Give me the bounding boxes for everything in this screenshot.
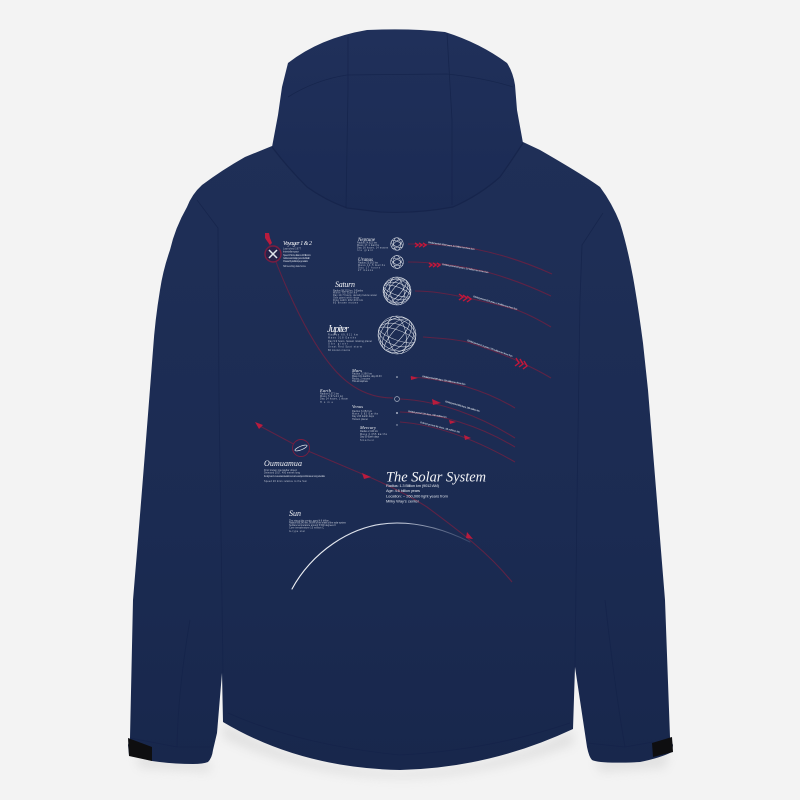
cuff tab: left [128, 738, 152, 761]
label: voyager: Still sending data home [283, 265, 307, 268]
label: mars: Radius 3,390 km [352, 372, 372, 376]
label: sun: Surface temperature around 5,500 degrees C [289, 524, 336, 527]
label: saturn: Mass 95 Earths [333, 292, 358, 294]
label: saturn [333, 280, 377, 304]
uranus orbit [408, 262, 551, 296]
label: venus: Day 243 Earth days [352, 415, 375, 418]
label: oumuamua [264, 459, 326, 483]
solar system artwork [255, 233, 552, 589]
label: venus: Venus [352, 404, 363, 409]
label: saturn: Ring width 282,000 km [333, 299, 363, 302]
label: mars: Mass 0.11 Earths, day 24.6 h [352, 375, 383, 378]
label: mercury: Radius 2,440 km [360, 430, 378, 433]
label: jupiter: 80 known moons [328, 349, 351, 352]
label: mercury [359, 425, 388, 442]
planet: earth [395, 397, 399, 401]
sun arc [292, 523, 470, 589]
label: venus [352, 404, 379, 421]
label: uranus: Radius 25,362 km [358, 262, 378, 264]
label: sun: G-type star [289, 530, 305, 533]
label: earth: Mass 5.97e24 kg [320, 395, 344, 398]
title block: Radius: 1.3 Billion km (9012 AM) [386, 483, 440, 488]
label: mercury: Mercury [359, 425, 376, 430]
label: neptune: Mass 17.1 Earths [357, 244, 380, 247]
label: venus: Mass 0.82 Earths [352, 412, 379, 416]
title block: Location: ~ 260,000 light years from [386, 494, 449, 498]
label: voyager: Interstellar space [283, 250, 300, 254]
earth orbit [400, 399, 515, 438]
label: uranus: Mass 14.5 Earths [358, 264, 386, 267]
venus orbit: Orbital period 225 days, 108 million km [408, 410, 447, 419]
label: oumuamua: Speed 26 km/s relative to the Sun [264, 480, 308, 483]
label: jupiter [327, 324, 372, 352]
planet: jupiter [373, 310, 421, 360]
mars orbit [410, 375, 515, 408]
label: venus: Radius 6,052 km [352, 410, 372, 413]
mars orbit: Orbital period 687 days, 228 million km from Sun [422, 375, 466, 386]
label: sun: The star at the centre, aged 4.6 billion [289, 520, 330, 522]
label: jupiter: Jupiter [327, 324, 349, 335]
oumuamua trajectory [255, 422, 512, 582]
label: neptune: Neptune [357, 238, 376, 243]
title block: Milky Way's center [386, 498, 420, 504]
label: neptune [357, 238, 389, 252]
label: voyager [283, 241, 312, 268]
label: saturn: 83 known moons [333, 302, 359, 304]
title block: The Solar System [386, 470, 486, 486]
title block [386, 470, 486, 504]
label: voyager: Speed 17 km/s, distance 22 billion km [283, 254, 311, 257]
label: oumuamua: Oumuamua [264, 459, 302, 468]
planet: mercury [396, 424, 398, 426]
label: uranus: 27 moons [358, 269, 374, 272]
planet: uranus [390, 255, 404, 269]
label: neptune: Day 16 hours, 14 moons [357, 246, 389, 250]
label: sun: Radius 696,340 km, 99.8% of the mass of the solar system [289, 522, 346, 524]
planet: mars [396, 376, 398, 378]
label: saturn: Day 10.7 hours, density below water [333, 294, 377, 297]
mercury orbit: Orbital period 88 days, 58 million km [420, 421, 460, 434]
label: mercury: Day 59 Earth days [360, 436, 380, 438]
label: voyager: Powered by radioisotope generators [283, 260, 309, 263]
label: saturn: Gas giant with rings [333, 296, 360, 300]
label: uranus: Day 17 hours [358, 266, 381, 270]
earth orbit: Orbital period 365 days, 150 million km [445, 400, 480, 413]
label: earth: Earth [319, 388, 332, 393]
venus orbit [400, 410, 515, 447]
label: earth: Home [320, 401, 334, 404]
label: voyager: Golden record carrying sounds of Earth [283, 257, 311, 260]
label: mercury: Mass 0.055 Earths [360, 433, 388, 436]
label: neptune: Ice giant [357, 249, 373, 252]
label: earth: Day 24 hours, 1 moon [320, 398, 349, 400]
label: mars: Rocky, 2 moons [352, 378, 371, 380]
label: mars [351, 368, 383, 383]
label: jupiter: Day 9.9 hours, fastest rotating planet [328, 340, 372, 343]
label: venus: Hottest planet [352, 418, 368, 421]
saturn orbit [415, 291, 551, 327]
label: jupiter: Great Red Spot storm [328, 346, 362, 348]
planet: neptune [390, 237, 404, 251]
label: sun: Sun [289, 509, 301, 518]
label: jupiter: Mass 318 Earths [328, 336, 357, 340]
voyager trajectory [268, 240, 393, 398]
label: mercury: Smallest [360, 439, 374, 442]
label: oumuamua: Its origin and unusual acceleration remain a subject of debate among scientists [264, 475, 326, 478]
planet: venus [396, 412, 398, 414]
label: neptune: Radius 24,622 km [357, 242, 377, 244]
label: oumuamua: First known interstellar object [264, 469, 297, 472]
planet: saturn [379, 273, 415, 309]
hood [272, 29, 523, 212]
label: earth [319, 388, 349, 404]
neptune orbit [408, 241, 552, 274]
uranus orbit: Orbital period 84 years, 2.9 billion km from Sun [442, 263, 489, 274]
jupiter orbit: Orbital period 11.9 years, 778 million km from Sun [467, 339, 513, 358]
label: saturn: Radius 58,232 km, 9 Earths [333, 290, 364, 292]
icon: oumuamua [292, 440, 310, 456]
title block: Age: 4.6 billion years [386, 488, 420, 493]
label: mars: Mars [351, 368, 362, 373]
label: uranus: Uranus [358, 258, 373, 263]
label: sun: Core temperature 15 million C [289, 526, 324, 530]
jacket seams [130, 200, 653, 755]
label: voyager: Launched 1977 [283, 248, 302, 250]
cuff tab: right [652, 737, 673, 757]
label: earth: Radius 6,371 km [320, 392, 339, 396]
jacket body and sleeves [128, 142, 673, 770]
label: uranus [358, 258, 386, 272]
label: jupiter: Gas giant [328, 342, 348, 346]
saturn orbit: Orbital period 29.4 years, 1.4 billion km from Sun [473, 295, 518, 311]
neptune orbit: Orbital period 164.8 years, 4.5 billion km from Sun [428, 241, 475, 251]
voyager icon [265, 233, 281, 262]
label: sun [289, 509, 346, 533]
jupiter orbit [423, 337, 551, 378]
label: voyager: Voyager 1 & 2 [283, 241, 312, 247]
jacket drop shadow [135, 722, 670, 778]
label: saturn: Saturn [335, 280, 355, 289]
mercury orbit [400, 421, 515, 462]
label: jupiter: Radius 69,911 km [328, 334, 358, 336]
label: oumuamua: Detected 2017, 400 metres long [264, 472, 301, 474]
label: mars: Thin atmosphere [352, 380, 369, 383]
